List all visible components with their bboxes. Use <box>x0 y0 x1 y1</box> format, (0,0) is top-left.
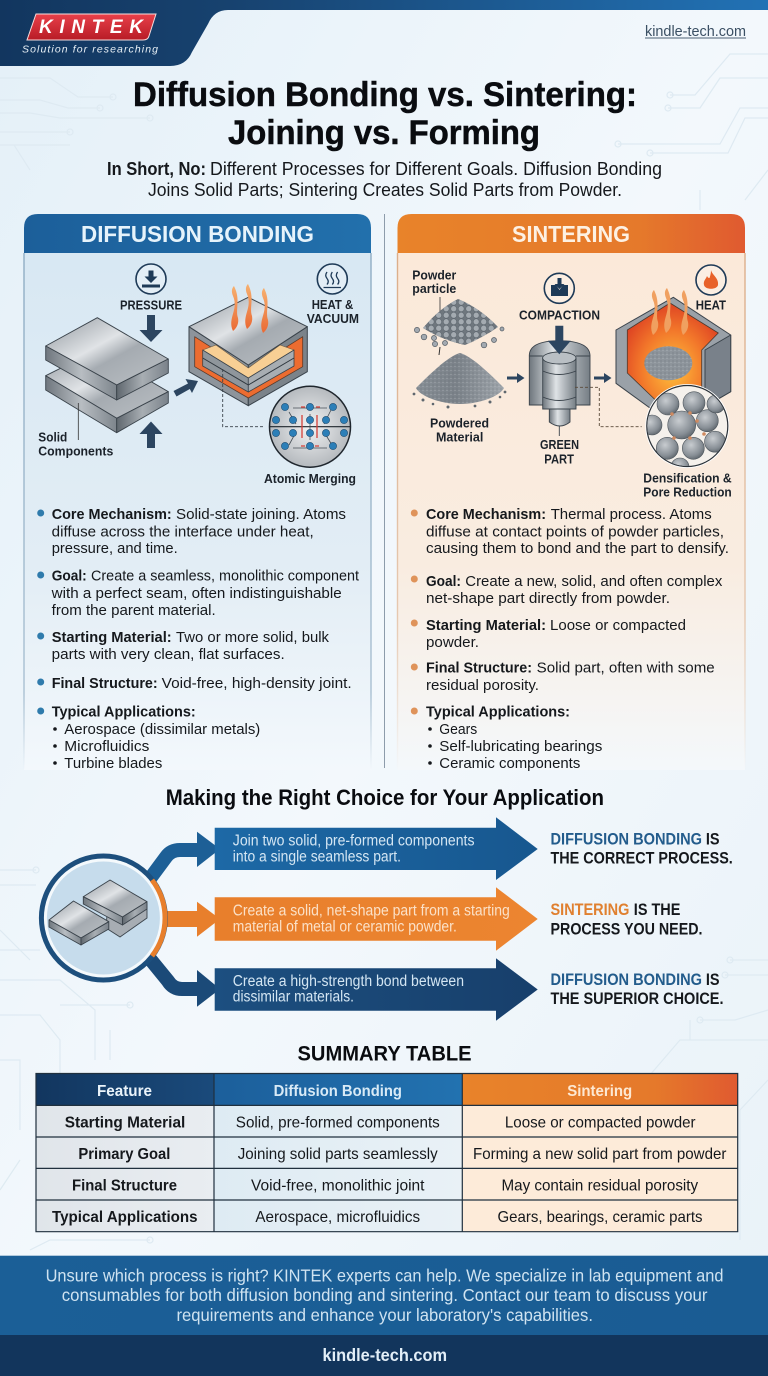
list: sintering: diffuse at contact points of powder particles, <box>426 524 724 540</box>
logo: KINTEK: KINTEK <box>39 17 144 38</box>
table header row: Diffusion Bonding <box>274 1083 402 1100</box>
arrow: compaction down <box>548 326 571 354</box>
list: sintering: powder. <box>426 634 479 651</box>
label: powder particle: particle <box>412 282 456 296</box>
row: primary goal: Forming a new solid part from powder <box>473 1146 727 1163</box>
row: final structure <box>72 1178 698 1195</box>
footer website bar: kindle-tech.com <box>322 1345 447 1365</box>
flames <box>231 284 268 333</box>
row: starting material <box>65 1114 696 1131</box>
heading: right choice: Making the Right Choice for Your Application <box>166 785 604 810</box>
list: diffusion bonding: Solid-state joining. Atoms <box>176 506 346 523</box>
result 1: IS <box>706 829 720 848</box>
option arrow 2 <box>215 887 538 951</box>
compaction die <box>529 341 590 436</box>
list: diffusion bonding: parts with very clean, flat surfaces. <box>52 646 285 663</box>
list: sintering: Core Mechanism: <box>426 506 546 523</box>
row: starting material: Solid, pre-formed components <box>236 1114 440 1131</box>
list: diffusion bonding: with a perfect seam, often indistinguishable <box>51 585 342 602</box>
subtitle: Joins Solid Parts; Sintering Creates Solid Parts from Powder. <box>148 180 622 200</box>
result 1 <box>550 829 733 867</box>
result 1: THE CORRECT PROCESS. <box>550 848 733 867</box>
row: primary goal <box>78 1146 727 1163</box>
result 2: PROCESS YOU NEED. <box>550 919 702 938</box>
title: Diffusion Bonding vs. Sintering: <box>133 76 637 114</box>
label: atomic merging: Atomic Merging <box>264 472 356 486</box>
subtitle <box>107 159 662 200</box>
website link top: kindle-tech.com <box>645 24 746 40</box>
label: densification <box>643 472 732 500</box>
label: powder particle: Powder <box>412 268 456 282</box>
label: powdered material: Material <box>436 431 483 445</box>
label: solid components: Solid <box>38 431 67 445</box>
row: typical applications: Typical Applications <box>52 1209 198 1226</box>
result 3: THE SUPERIOR CHOICE. <box>550 989 724 1008</box>
connector: to option 1 <box>146 832 220 884</box>
result 2: IS THE <box>634 900 680 919</box>
dashed connector to spheres <box>575 387 642 427</box>
label: powdered material: Powdered <box>430 416 489 430</box>
list: diffusion bonding: Two or more solid, bulk <box>176 629 329 646</box>
arrow: pressure up <box>140 422 162 448</box>
list: sintering: Loose or compacted <box>550 617 686 634</box>
option arrow 2: Create a solid, net-shape part from a starting <box>233 903 510 920</box>
panel: diffusion bonding <box>24 214 371 772</box>
list: sintering: causing them to bond and the part to densify. <box>426 540 729 557</box>
list: diffusion bonding: Microfluidics <box>64 738 149 755</box>
option arrow 2: material of metal or ceramic powder. <box>233 919 457 936</box>
vacuum chamber <box>189 297 307 406</box>
panel header: sintering <box>398 214 745 253</box>
solid components plates <box>46 318 168 433</box>
result 1: DIFFUSION BONDING <box>550 829 702 848</box>
title: Joining vs. Forming <box>228 114 540 152</box>
list: sintering: Ceramic components <box>439 755 580 772</box>
option arrow 1: into a single seamless part. <box>233 849 401 866</box>
row: starting material: Loose or compacted powder <box>505 1114 696 1131</box>
powder particles <box>414 299 504 355</box>
list: diffusion bonding: from the parent material. <box>52 602 216 619</box>
atomic merging detail <box>270 386 350 467</box>
table header row: Sintering <box>567 1083 632 1100</box>
label: heat and vacuum <box>307 298 359 326</box>
summary table <box>36 1074 738 1232</box>
label: heat and vacuum: VACUUM <box>307 312 359 326</box>
table header row <box>36 1074 738 1106</box>
list: sintering: Solid part, often with some <box>537 660 715 677</box>
sintering furnace <box>616 297 731 425</box>
icon: heat <box>696 265 726 295</box>
list: diffusion bonding: Starting Material: <box>52 629 172 646</box>
option arrow 3 <box>215 958 538 1021</box>
footer call to action: requirements and enhance your laboratory's capabilities. <box>176 1305 593 1325</box>
list: diffusion bonding: Create a seamless, monolithic component <box>91 568 360 585</box>
icon: source plates circle <box>41 856 165 980</box>
result 3: IS <box>706 970 720 989</box>
title <box>133 76 637 152</box>
label: green part <box>540 438 579 466</box>
dashed connector to atoms <box>223 369 265 427</box>
connector: to option 3 <box>146 954 220 1007</box>
panel header: diffusion bonding <box>24 214 371 253</box>
label: heat and vacuum: HEAT & <box>312 298 353 312</box>
furnace flames <box>651 288 688 335</box>
icon: heat and vacuum <box>317 264 347 294</box>
footer call to action: Unsure which process is right? KINTEK experts can help. We specialize in lab equipment and <box>46 1266 724 1286</box>
panel header: diffusion bonding: DIFFUSION BONDING <box>81 221 314 247</box>
list: sintering: Gears <box>439 721 477 738</box>
row: typical applications: Aerospace, microfluidics <box>255 1209 420 1226</box>
row: primary goal: Primary Goal <box>78 1146 170 1163</box>
option arrow 1: Join two solid, pre-formed components <box>233 833 475 850</box>
row: final structure: Final Structure <box>72 1178 177 1195</box>
heading: summary table: SUMMARY TABLE <box>298 1043 472 1066</box>
option arrow 1 <box>215 817 538 880</box>
label: pressure: PRESSURE <box>120 298 182 312</box>
list: diffusion bonding: Goal: <box>52 568 87 585</box>
label: green part: GREEN <box>540 438 579 452</box>
arrow: to die <box>507 373 524 383</box>
label: solid components <box>38 403 113 459</box>
list: diffusion bonding: pressure, and time. <box>52 540 178 557</box>
list: sintering: Goal: <box>426 573 461 590</box>
result 2 <box>550 900 702 938</box>
list: diffusion bonding: Core Mechanism: <box>52 506 172 523</box>
list: sintering: Starting Material: <box>426 617 546 634</box>
panel header: sintering: SINTERING <box>512 221 630 247</box>
list: diffusion bonding: Aerospace (dissimilar metals) <box>64 721 260 738</box>
powder pile <box>413 353 506 408</box>
logo: KINTEK <box>22 14 158 56</box>
center divider <box>384 214 385 768</box>
row: final structure: Void-free, monolithic joint <box>251 1178 425 1195</box>
row: final structure: May contain residual porosity <box>502 1178 698 1195</box>
label: solid components: Components <box>38 445 113 459</box>
row: typical applications: Gears, bearings, ceramic parts <box>498 1209 702 1226</box>
row: primary goal: Joining solid parts seamlessly <box>238 1146 438 1163</box>
arrow: pressure down <box>140 315 162 342</box>
list: sintering <box>411 506 729 772</box>
list: sintering: net-shape part directly from powder. <box>426 590 670 607</box>
list: diffusion bonding <box>37 506 360 772</box>
decision flow <box>41 817 733 1021</box>
label: densification: Pore Reduction <box>643 486 732 500</box>
row: starting material: Starting Material <box>65 1114 185 1131</box>
subtitle: In Short, No: <box>107 159 206 179</box>
option arrow 3: dissimilar materials. <box>233 989 354 1006</box>
footer call to action: consumables for both diffusion bonding and sintering. Contact our team to discuss your <box>62 1285 708 1305</box>
panel: sintering <box>398 214 745 772</box>
list: sintering: residual porosity. <box>426 677 539 694</box>
footer call to action <box>0 1256 768 1335</box>
table header row: Feature <box>97 1083 152 1100</box>
list: diffusion bonding: Final Structure: <box>52 675 158 692</box>
subtitle: Different Processes for Different Goals. Diffusion Bonding <box>210 159 662 179</box>
footer website bar <box>0 1335 768 1376</box>
densification detail <box>645 384 730 468</box>
arrow: to chamber <box>174 379 198 396</box>
connector: to option 2 <box>160 902 220 937</box>
logo: KINTEK: Solution for researching <box>22 44 158 56</box>
list: sintering: Typical Applications: <box>426 704 570 721</box>
header band <box>0 0 768 66</box>
list: diffusion bonding: diffuse across the interface under heat, <box>52 524 314 540</box>
list: diffusion bonding: Typical Applications: <box>52 704 196 721</box>
row: typical applications <box>52 1209 702 1226</box>
label: heat: HEAT <box>696 298 726 312</box>
list: sintering: Create a new, solid, and often complex <box>465 573 723 590</box>
table body cells <box>36 1106 738 1232</box>
label: green part: PART <box>544 452 574 466</box>
label: compaction: COMPACTION <box>519 308 600 322</box>
label: densification: Densification & <box>643 472 732 486</box>
list: diffusion bonding: Void-free, high-density joint. <box>162 675 352 692</box>
option arrow 3: Create a high-strength bond between <box>233 973 464 990</box>
result 3: DIFFUSION BONDING <box>550 970 702 989</box>
list: diffusion bonding: Turbine blades <box>64 755 162 772</box>
label: powder particle <box>412 268 456 312</box>
label: powdered material <box>430 416 489 445</box>
list: sintering: Self-lubricating bearings <box>439 738 602 755</box>
result 2: SINTERING <box>550 900 629 919</box>
list: sintering: Thermal process. Atoms <box>551 506 712 523</box>
icon: pressure <box>136 264 166 294</box>
arrow: to furnace <box>594 373 612 383</box>
list: sintering: Final Structure: <box>426 660 532 677</box>
icon: compaction <box>544 273 574 303</box>
result 3 <box>550 970 724 1008</box>
